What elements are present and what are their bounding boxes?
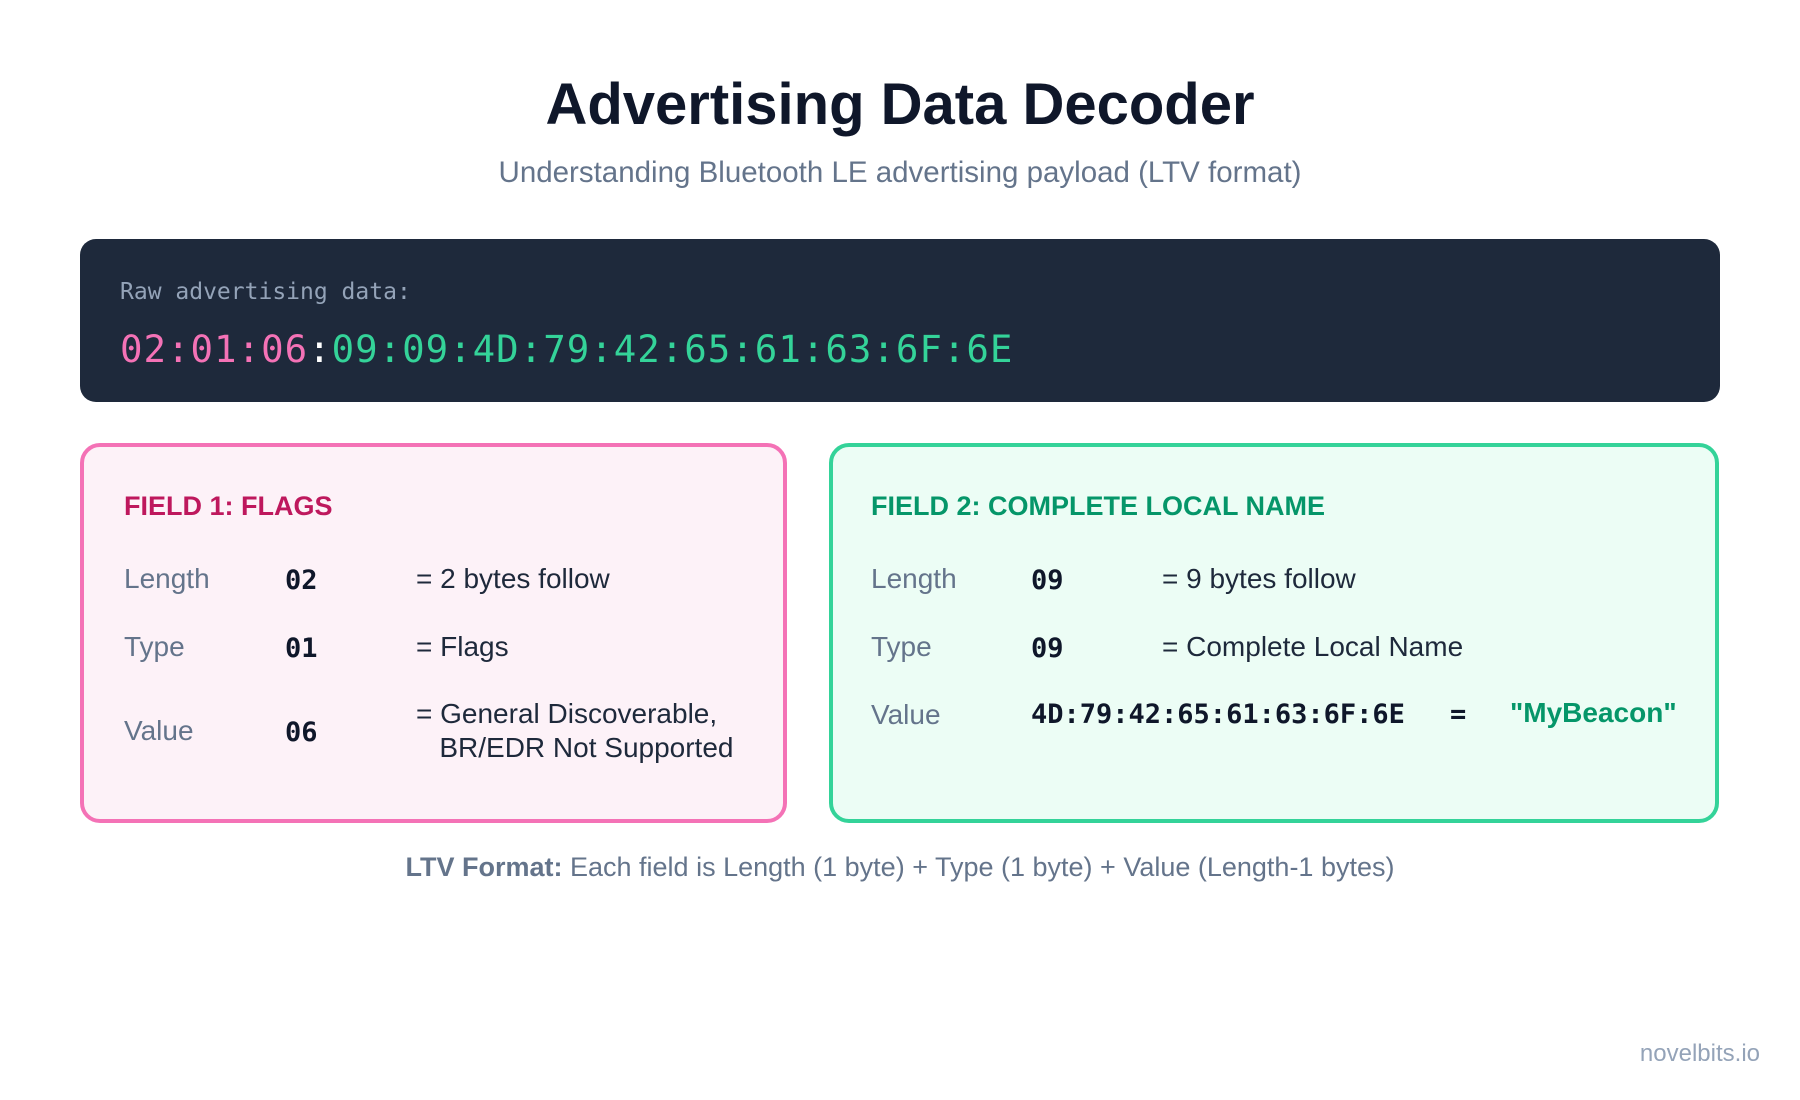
length row [124, 563, 610, 596]
raw hex string: 02:01:06:09:09:4D:79:42:65:61:63:6F:6E [120, 327, 1013, 371]
length row: = 9 bytes follow [1162, 563, 1356, 594]
value row: Value [871, 699, 941, 730]
length row [871, 563, 1356, 596]
length row: Length [871, 563, 957, 594]
value row [124, 698, 733, 763]
length row: Length [124, 563, 210, 594]
raw data label: Raw advertising data: [120, 279, 411, 305]
subtitle: Understanding Bluetooth LE advertising payload (LTV format) [499, 156, 1301, 189]
value row: "MyBeacon" [1510, 697, 1677, 728]
type row: = Complete Local Name [1162, 631, 1463, 662]
value row: 4D:79:42:65:61:63:6F:6E [1031, 699, 1405, 730]
panel: field 1 flags [80, 443, 787, 823]
value row: BR/EDR Not Supported [439, 732, 733, 763]
type row: = Flags [416, 631, 509, 662]
panel: field 2 complete local name [829, 443, 1719, 823]
length row: = 2 bytes follow [416, 563, 610, 594]
type row: 01 [285, 633, 318, 664]
field 2 heading: FIELD 2: COMPLETE LOCAL NAME [871, 491, 1325, 521]
value row: = [1450, 699, 1466, 730]
value row: 06 [285, 717, 318, 748]
footer note: LTV Format: Each field is Length (1 byte) + Type (1 byte) + Value (Length-1 bytes) [406, 852, 1394, 882]
type row [871, 631, 1463, 664]
type row: Type [124, 631, 185, 662]
brand: novelbits.io [1640, 1040, 1760, 1067]
length row: 09 [1031, 565, 1064, 596]
value row [871, 697, 1677, 730]
value row: = General Discoverable, [416, 698, 717, 729]
type row: 09 [1031, 633, 1064, 664]
length row: 02 [285, 565, 318, 596]
raw data panel [80, 239, 1720, 402]
field 1 heading: FIELD 1: FLAGS [124, 491, 332, 521]
title: Advertising Data Decoder [545, 72, 1255, 137]
value row: Value [124, 715, 194, 746]
type row: Type [871, 631, 932, 662]
type row [124, 631, 509, 664]
